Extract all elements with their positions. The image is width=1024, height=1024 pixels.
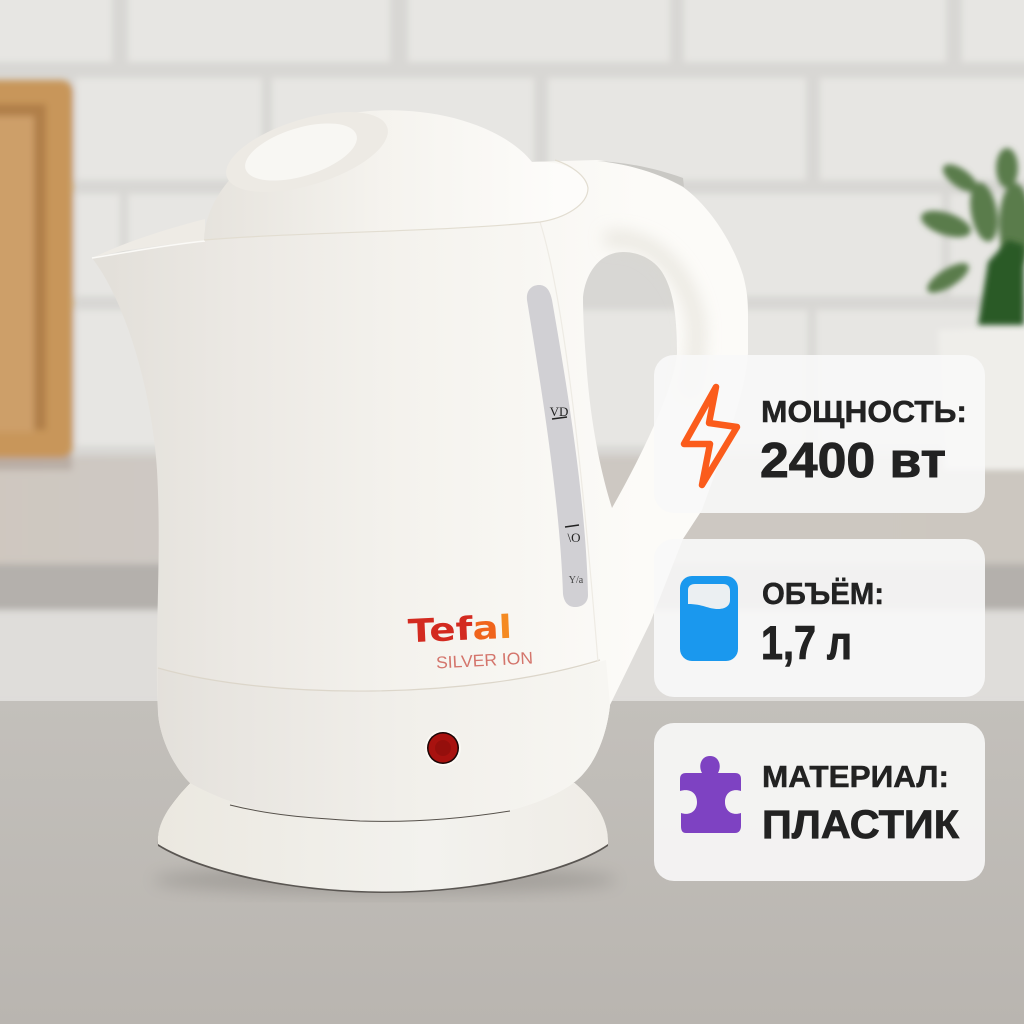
water level window — [527, 285, 588, 607]
kettle — [92, 96, 748, 894]
max mark: VD — [550, 404, 568, 419]
kettle silhouette with handle — [92, 160, 748, 822]
body seam — [540, 222, 598, 662]
icon: lightning bolt — [684, 387, 737, 485]
foreground countertop — [0, 701, 1024, 1024]
panel: material — [654, 723, 985, 881]
lower front band — [0, 610, 1024, 704]
kettle bottom edge — [230, 805, 510, 821]
handle switch — [597, 161, 684, 187]
brand logo: Tef al — [407, 608, 513, 650]
kettle shadow — [153, 866, 617, 894]
volume value: 1,7 л — [761, 616, 852, 669]
power value: 2400 вт — [760, 434, 946, 488]
icon: puzzle piece — [680, 756, 741, 833]
kettle spout — [92, 219, 205, 258]
lid button — [217, 96, 397, 208]
white brick wall — [0, 0, 1024, 446]
kettle lower shell — [158, 660, 610, 822]
kettle lid — [204, 96, 588, 240]
volume label: ОБЪЁМ: — [762, 576, 884, 611]
one litre mark: \O — [568, 530, 580, 545]
power indicator — [425, 730, 461, 766]
panel: volume — [654, 539, 985, 697]
handle inner shading — [605, 239, 697, 395]
material label: МАТЕРИАЛ: — [762, 759, 949, 794]
wooden cutting board — [0, 80, 73, 470]
panel: power — [654, 355, 985, 513]
power label: МОЩНОСТЬ: — [761, 394, 967, 429]
icon: water container — [680, 576, 738, 661]
plant and pot — [918, 148, 1024, 470]
back counter — [0, 456, 1024, 566]
kettle base — [158, 783, 608, 893]
material value: ПЛАСТИК — [762, 803, 960, 847]
min mark: Y/a — [569, 575, 584, 586]
silver ion text: SILVER ION — [436, 648, 533, 672]
